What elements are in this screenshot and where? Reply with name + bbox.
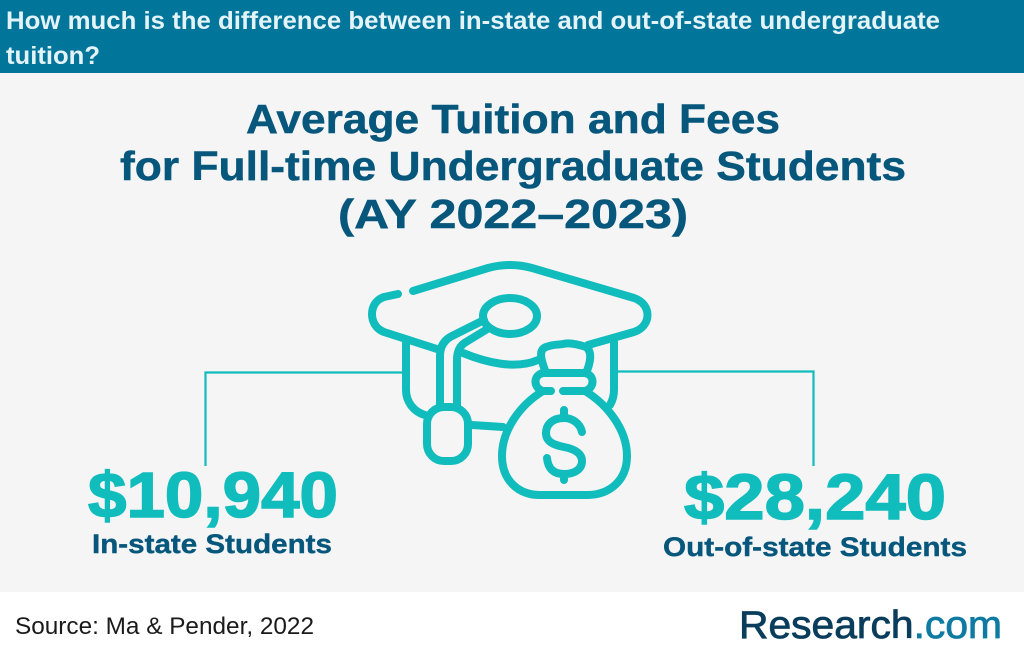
stat: out-of-state: $28,240: [684, 461, 946, 533]
connector: in-state: [206, 372, 402, 466]
header banner: tuition?: [6, 42, 100, 70]
stat: in-state: $10,940: [88, 459, 338, 531]
stat: out-of-state: [663, 461, 967, 562]
connector: out-of-state: [616, 372, 814, 466]
title: (AY 2022–2023): [338, 191, 688, 237]
tassel button: [483, 298, 537, 334]
header banner: [0, 0, 1024, 73]
stat: in-state: In-state Students: [92, 529, 332, 559]
source: Source: Ma & Pender, 2022: [15, 613, 314, 640]
stat: out-of-state: Out-of-state Students: [663, 532, 967, 562]
footer: [0, 592, 1024, 665]
tassel end: [427, 407, 468, 461]
tassel cord: [440, 320, 489, 406]
money bag knot: [541, 343, 590, 373]
title: Average Tuition and Fees: [246, 96, 780, 142]
stat: in-state: [88, 459, 338, 559]
cap top outline: [372, 265, 648, 350]
header banner: How much is the difference between in-state and out-of-state undergraduate: [6, 7, 940, 35]
logo: Research.com: Research.com: [739, 604, 1002, 647]
icon: graduation cap with money bag: [372, 265, 648, 495]
cap underside curve: [463, 353, 538, 365]
money bag body: [502, 391, 627, 495]
money bag band: [536, 373, 592, 391]
title: for Full-time Undergraduate Students: [120, 143, 906, 189]
dollar sign: [546, 410, 582, 480]
title: [120, 96, 906, 237]
cap body: [406, 342, 614, 427]
